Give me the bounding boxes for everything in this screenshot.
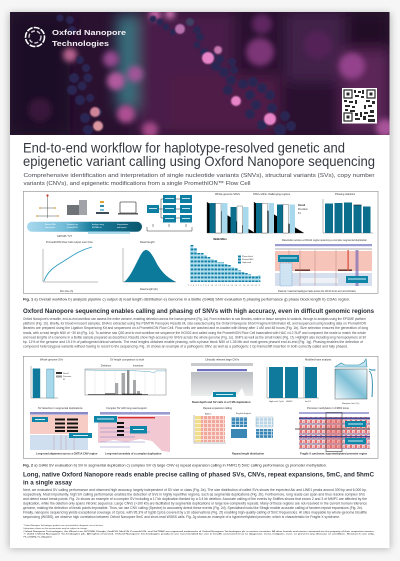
heading: SV section — [23, 472, 375, 486]
text block: SNV section body: reads, with a read length N50 of ~30 kb (Fig. 1d). To achieve raw Q30 and to end workflow we sequence the HG002 and called using the PromethION Flow Cell basecalled with HAC v4.2 SUP and compared the reads to match the whole — [23, 331, 366, 335]
panel a: whole genome SVs bars: Recall — [63, 373, 69, 375]
panel e: cumulative output line chart — [43, 240, 98, 293]
text block: SNV section body: platform (Fig. 1b). Briefly, for blood-innocent samples, DNA is extracted using the PDMTRI Panopore Results kit, size-selected using the Oxford Nanopore Short Fragment Eliminator kit, and sequenced using leading data on PromethION — [23, 322, 367, 326]
panel a: wet lab workflow icons — [36, 194, 138, 218]
pipeline arrow bar: Interpretation — [117, 223, 128, 226]
panel b: analysis flow chart — [147, 195, 192, 231]
text block: SNV section body: and read lengths of a Genome in a Bottle sample prepared as described. Results show high accuracy for SNVs across the whole genome (Fig. 1e). SNPs as well as the small indels (Fig. 1f). Highlight also including long homopolymers at 30 — [23, 335, 366, 339]
panel i: small methylation grids: English English — [236, 413, 252, 415]
panel g: chromosome block chart: Phased SNV — [242, 259, 254, 261]
text block: SV section body: duplication, while the deletion only spans intronic sequence. Large CNVs (>100 kb) are facilitated by segmental duplications or large low-complexity repeats. Many of these regions are not resolved in the current human reference — [23, 502, 367, 506]
text block: SV section body: sequencing (WGBS), we observe high correlation between Oxford Nanopore 5mC and short-read WGBS calls. Fig. 2g shows an example of a hypermethylated promoter, which is characteristic for Fragile X syndrome. — [23, 515, 340, 519]
panel c: variant calling performance bars — [207, 192, 309, 241]
panel a: whole genome SVs bars: Whole genome SVs — [40, 358, 64, 362]
text block: SV section body: and detect exact break points. Fig. 2c shows an example of a complex SV including a 17 kb duplication flanked by a 3.4 kb deletion. Accurate calling of the events by Sniffles shows that exons 2 and 3 of MMP1 are affected by the — [23, 497, 367, 501]
panel e: cumulative output line chart: Run time (h) — [60, 290, 73, 293]
panel b: SV length distribution: SV length comparison to truth — [110, 358, 145, 362]
panel b: SV length distribution: Deletions — [101, 364, 112, 368]
panel g: complex SV with long-read support: Long-read assembly of a complex duplication — [105, 452, 162, 456]
title — [23, 140, 375, 169]
panel h: challenging region heat tracks — [275, 238, 372, 293]
subtitle: variants (CNVs), and epigenetic modifications from a single PromethION™ Flow Cell — [24, 181, 250, 187]
panel g: chromosome block chart — [188, 237, 261, 287]
panel j: promoter methylation tracks: Promoter methylation in FMR1 locus — [307, 406, 350, 410]
panel d: repeat expansion bars — [267, 358, 332, 403]
text block: SV section body: genome, making the detection of break points impossible. Thus, we use CNV calling (Spectre) to accurately detect these events (Fig. 2d). Specialised tools like Straglr enable accurate calling of tandem repeat expansions (Fig. 2e). — [23, 506, 363, 510]
panel g: complex SV with long-read support: Complex SV with long-read support — [106, 406, 147, 410]
heading: SNV section: Oxford Nanopore sequencing enables calling and phasing of SNVs with high accuracy, even in difficult genomic regions — [23, 308, 375, 315]
panel f: SV in segmental duplication — [30, 406, 98, 456]
panel h: challenging region heat tracks: Paternal / maternal haplotype tracks across the 100 kb locus and recombination — [278, 289, 356, 293]
banner photograph: DNA helix on purple background — [10, 9, 394, 138]
logo: Oxford Nanopore Technologies — [26, 28, 126, 48]
panel c: chromosome coverage: Clinically relevant large CNVs — [205, 358, 240, 362]
panel a: whole genome SVs bars — [31, 358, 71, 398]
pipeline arrow bar: and reports — [117, 226, 127, 229]
footnotes: *Oxford Nanopore Technologies products are not intended for diagnostic use at this time. — [24, 524, 104, 527]
panel d: phasing statistics bars: Phasing statistics — [335, 192, 356, 196]
text block: SV section body: Next, we evaluated SV calling performance and observed high accuracy, largely independent of SV size or class (Fig. 2a). The size distribution of called SVs shows the expected Alu and LINE1 peaks around 300 bp and 6,000 bp, — [23, 488, 367, 492]
footnotes: © 2024 Oxford Nanopore Technologies plc. All rights reserved. Oxford Nanopore Technologies products are not intended for use in health assessment or to diagnose, treat, mitigate, cure, or prevent any disease or condition. Research use only. — [24, 532, 375, 536]
pipeline arrow bar: EPI2ME wf — [92, 227, 102, 229]
panel d: repeat expansion bars: HG002 — [286, 401, 293, 403]
text block: SNV section body: bp. 11% of the genome and 15.1% of pathogenic/clinical variants. The read lengths obtained enable phasing, with a phase block N50 of 1.35 Mb and most genes phased end-to-end (Fig. 1g). Phasing enables the detection of — [23, 340, 363, 344]
footnotes: Oxford Nanopore Technologies, the Wheel icon, EPI2ME, Flongle, GridION, MinION, PromethION, and VolTRAX are registered trademarks of Oxford Nanopore Technologies plc in various countries. All other brands and names contained are the property of their respective owners. — [24, 530, 375, 533]
panel c: variant calling performance bars: Precision — [298, 208, 309, 211]
panel c: chromosome coverage — [191, 358, 253, 404]
panel c: variant calling performance bars: SNVs Indels — [214, 238, 228, 241]
panel c: variant calling performance bars: SNVs within challenging regions — [253, 192, 291, 196]
panel j: promoter methylation tracks: Fragile X syndrome: hypermethylated promoter region — [300, 452, 368, 456]
heading: SV section: Long, native Oxford Nanopore reads enable precise calling of phased SVs, CNVs, repeat expansions, 5mC, and 5hmC — [23, 472, 375, 478]
footnotes: PS_1234(EN)_V1_14Aug2024 — [24, 536, 52, 538]
panel g: chromosome block chart: 1 2 3 4 5 6 7 8 9 10 11 12 13 14 15 16 17 18 19 20 21 X — [188, 285, 261, 287]
text block: SV section body: Finally, nanopore sequencing yields exceptional coverage of CpGs, with 95.3% of hg38 CpGs covered by ≥10 observations (Fig. 2f) enabling high-quality calling of 5mC frequencies. At sites mappable by whole-genome bisulfite — [23, 510, 367, 514]
panel g: complex SV with long-read support — [94, 406, 170, 456]
panel b: SV length distribution: Insertions — [133, 364, 144, 368]
footnotes: Information shown on this presentation may be subject to change. — [24, 527, 88, 530]
panel: figure 2 — [23, 356, 378, 458]
panel e: methylation density plot: Nanopore 5mC (%) — [342, 403, 360, 405]
panel h: repeat expansion heatmap: Repeat expansion calling — [203, 406, 233, 410]
panel b: SV length distribution — [85, 358, 166, 395]
icon: QR code — [342, 88, 377, 124]
panel e: cumulative output line chart: PromethION Flow Cell output over time — [46, 240, 93, 244]
panel c: variant calling performance bars: Recall — [298, 204, 305, 207]
subtitle — [24, 173, 375, 187]
figure 1 caption: Fig. 1 a) Overall workflow b) analysis pipeline c) output d) read length distribution e) Genome in a Bottle (GIAB) SNV evaluation f) phasing performance g) phase block length h) CDA1 region. — [23, 298, 350, 302]
logo: Oxford Nanopore Technologies: Technologies — [52, 39, 109, 48]
panel g: chromosome block chart: Read N50 — [213, 237, 225, 241]
panel d: repeat expansion bars: Modified base analysis — [305, 358, 332, 362]
panel c: variant calling performance bars: F1 — [298, 212, 301, 215]
pipeline arrow bar: and prepare — [45, 226, 55, 229]
pipeline arrow bar: Sequence on — [67, 224, 78, 226]
panel h: repeat expansion heatmap — [194, 406, 233, 443]
text block: SNV section body: compound heterozygous variants without having to resort to trio sequencing. Fig. 1h shows an example of a pathogenic SNV, as well as a pathogenic 1 bp frameshift insertion in both correctly called and fully phased. — [23, 345, 348, 349]
panel f: SV in segmental duplication: Long-read alignment across a CMT1A CNV region — [36, 452, 98, 456]
panel f: read length histogram — [123, 240, 176, 291]
panel g: chromosome block chart: Phase block — [242, 256, 253, 258]
panel f: SV in segmental duplication: SV detection in segmental duplications — [38, 406, 83, 410]
panel c: chromosome coverage: Read depth and SV calls in a 5 Mb duplication — [192, 400, 251, 404]
pipeline arrow bar: Extract DNA — [45, 223, 56, 226]
panel h: repeat expansion heatmap: Alleles — [205, 412, 212, 416]
panel a: whole genome SVs bars: F1 — [63, 379, 66, 381]
text block: SNV section body — [23, 317, 368, 349]
text block: SNV section body: libraries are prepared using the Ligation Sequencing Kit and sequenced on a PromethION Flow Cell. Flow cells are washed and re-loaded with library after 1 uM and 48 hours (Fig. 1b). Size selection ensures the generation of long — [23, 326, 368, 330]
footnotes — [24, 524, 375, 538]
icon: logo ring — [26, 28, 44, 46]
panel i: small methylation grids: Repeat length distribution — [232, 452, 265, 456]
pipeline arrow bar: PromethION — [67, 226, 78, 229]
text block: SV section body — [23, 488, 367, 519]
logo: Oxford Nanopore Technologies: Oxford Nanopore — [52, 28, 126, 37]
panel h: challenging region heat tracks: Resolution across a CDA11 region spanning a complex segmental duplication — [282, 238, 367, 242]
text block: SV section body: respectively. Most importantly, high SV calling performance enables the detection of SVs in highly repetitive regions, such as segmental duplications (Fig. 2b). Furthermore, long reads can span and thus resolve complex SVs — [23, 492, 365, 496]
panel f: read length histogram: Read length — [140, 240, 155, 244]
title: End-to-end workflow for haplotype-resolved genetic and — [23, 140, 345, 156]
panel f: read length histogram: Read length (kb) — [140, 288, 158, 291]
subtitle: Comprehensive identification and interpretation of single nucleotide variants (SNVs), structural variants (SVs), copy number — [24, 173, 375, 179]
figure 2 caption: Fig. 2 a) GIAB SV evaluation b) SV in segmental duplication c) complex SV d) large CNV e) repeat expansion calling in FMR1 f) 5mC calling performance g) promoter methylation. — [23, 464, 327, 468]
heading: SV section: in a single assay — [23, 480, 73, 486]
panel: figure 1 — [23, 191, 378, 293]
title: epigenetic variant calling using Oxford Nanopore sequencing — [23, 154, 375, 169]
panel i: small methylation grids — [231, 413, 273, 456]
panel d: repeat expansion bars: hmCG — [305, 401, 311, 403]
panel j: promoter methylation tracks — [295, 406, 370, 456]
pipeline arrow bar: Analyse using — [92, 223, 104, 226]
pipeline arrow bar: GRCh38 / T2T — [57, 236, 72, 238]
panel e: methylation density plot — [335, 359, 376, 405]
panel d: phasing statistics bars — [323, 192, 373, 233]
panel g: chromosome block chart: Unphased — [242, 262, 251, 264]
panel d: repeat expansion bars: High-conf. CpGs — [269, 401, 284, 403]
pipeline arrow bar — [27, 222, 142, 238]
panel c: variant calling performance bars: Whole-genome SNVs — [215, 192, 241, 196]
text block: SNV section body: Oxford Nanopore's versatile, end-to-end workflow can assess the entire variome, enabling detection across the human genome (Fig. 1a). From extraction to raw libraries, native or tissue samples to variants, through to analysis using the EPI2ME platform — [23, 317, 366, 321]
panel a: whole genome SVs bars: Precision — [63, 376, 71, 378]
